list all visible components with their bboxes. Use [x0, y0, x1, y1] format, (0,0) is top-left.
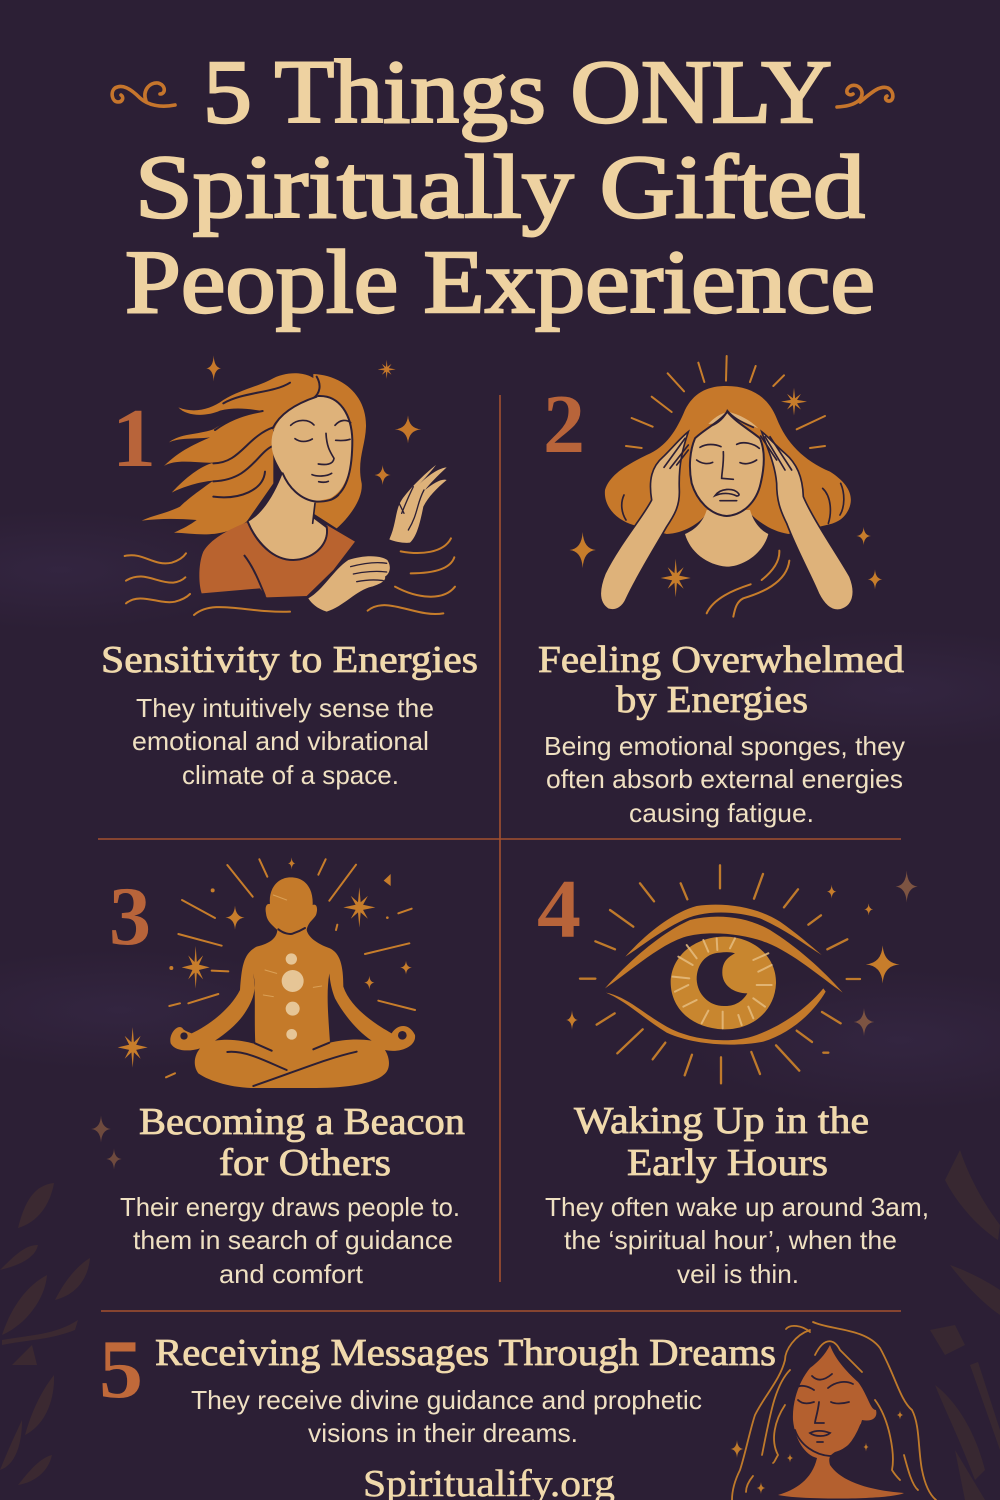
- illustration: woman sensing energy: [125, 355, 455, 615]
- description: them in search of guidance: [133, 1225, 453, 1255]
- description: They receive divine guidance and prophetic: [191, 1385, 702, 1415]
- heading: [574, 1100, 869, 1184]
- face and neck: [778, 1345, 904, 1499]
- heading: Sensitivity to Energies: [101, 639, 478, 681]
- title: Spiritually Gifted: [135, 138, 865, 237]
- title: 5 Things ONLY: [203, 43, 832, 142]
- radiating marks: [626, 356, 825, 617]
- illustration: dreaming woman: [730, 1322, 936, 1500]
- energy waves: [125, 538, 455, 615]
- hair: [605, 386, 851, 534]
- description: [132, 693, 434, 790]
- heading: Feeling Overwhelmed: [538, 639, 904, 681]
- heading: [139, 1101, 465, 1184]
- description: Being emotional sponges, they: [544, 731, 905, 761]
- dividers: [98, 395, 901, 1311]
- panel: item 5: [99, 1322, 936, 1500]
- number 2: 2: [543, 378, 585, 471]
- background leaves left: [0, 1183, 90, 1485]
- face: [690, 412, 764, 516]
- description: They often wake up around 3am,: [545, 1192, 929, 1222]
- panel: item 2: [538, 356, 905, 828]
- neck: [685, 510, 768, 567]
- heading: Becoming a Beacon: [139, 1101, 465, 1143]
- number 5: 5: [99, 1323, 143, 1416]
- description: often absorb external energies: [546, 764, 903, 794]
- heading: by Energies: [616, 679, 808, 721]
- small stars left margin: [91, 1116, 122, 1170]
- number 3: 3: [109, 870, 151, 963]
- description: causing fatigue.: [629, 798, 814, 828]
- description: emotional and vibrational: [132, 726, 429, 756]
- illustration: meditating figure: [118, 857, 415, 1088]
- description: visions in their dreams.: [308, 1418, 578, 1448]
- description: They intuitively sense the: [136, 693, 434, 723]
- title: People Experience: [125, 233, 875, 332]
- description: climate of a space.: [182, 760, 399, 790]
- heading: Waking Up in the: [574, 1100, 869, 1142]
- panel: item 4: [537, 863, 929, 1289]
- description: [191, 1385, 702, 1448]
- illustration: third eye: [566, 865, 918, 1083]
- shirt: [199, 522, 355, 597]
- skin: [248, 397, 352, 560]
- flourish: left of title: [112, 83, 175, 106]
- description: [545, 1192, 929, 1289]
- description: Their energy draws people to.: [120, 1192, 460, 1222]
- lower hand: [308, 556, 390, 612]
- description: [120, 1192, 460, 1289]
- gaps between arms and torso: [180, 973, 407, 1044]
- background leaves right: [930, 1150, 1000, 1500]
- iris: [671, 937, 776, 1029]
- heading: Early Hours: [627, 1142, 828, 1184]
- number 4: 4: [537, 863, 581, 956]
- illustration: overwhelmed woman: [569, 356, 882, 617]
- panel: item 1: [101, 355, 478, 790]
- arms: [600, 432, 688, 610]
- flourish: right of title: [837, 85, 893, 107]
- heading: Receiving Messages Through Dreams: [155, 1332, 776, 1374]
- description: the ‘spiritual hour’, when the: [564, 1225, 897, 1255]
- hair outline: [732, 1322, 936, 1500]
- description: veil is thin.: [677, 1259, 799, 1289]
- heading: [538, 639, 904, 721]
- title: [125, 43, 875, 332]
- heading: for Others: [219, 1142, 391, 1184]
- right hand: [389, 465, 447, 543]
- panel: item 3: [109, 857, 465, 1289]
- description: and comfort: [219, 1259, 364, 1289]
- description: [544, 731, 905, 828]
- number 1: 1: [112, 392, 156, 485]
